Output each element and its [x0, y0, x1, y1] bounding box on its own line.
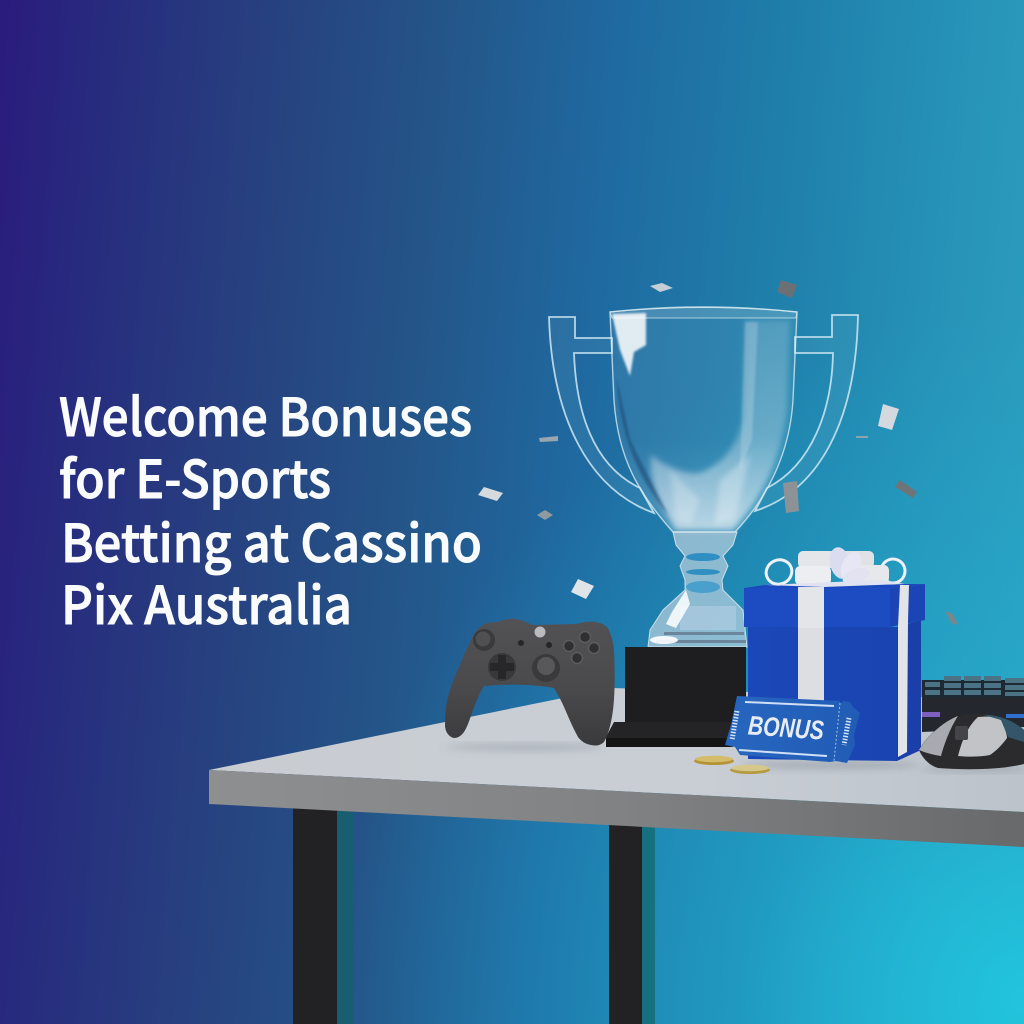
- lid top sliver: [744, 584, 925, 588]
- trophy base: [606, 647, 746, 747]
- mouse: [919, 714, 1024, 769]
- trophy left handle: [549, 317, 654, 513]
- keyboard: [922, 676, 1024, 732]
- face buttons: [564, 632, 600, 664]
- ribbon front: [798, 628, 824, 703]
- left thumbstick: [473, 629, 495, 651]
- confetti: [478, 280, 958, 625]
- title: Betting at Cassino: [61, 502, 482, 577]
- box lid side: [890, 584, 925, 627]
- title: [59, 376, 482, 639]
- small buttons: [518, 640, 552, 648]
- ticket barcode: left: [732, 711, 737, 740]
- d-pad: [488, 653, 516, 681]
- bowl rim: [610, 308, 797, 318]
- scroll wheel: [955, 726, 968, 740]
- ticket label: BONUS: [747, 710, 825, 746]
- object shadows: [445, 744, 1024, 772]
- stem reflections: [650, 553, 746, 644]
- right thumbstick: [532, 654, 560, 682]
- trophy: [549, 307, 858, 747]
- mouse right panel: [958, 717, 1007, 757]
- table leg: left: [293, 805, 354, 1024]
- gift box: [744, 545, 925, 761]
- table front edge: [209, 770, 1024, 847]
- box body side: [897, 620, 921, 761]
- table leg: right: [609, 822, 655, 1024]
- bow: [762, 545, 909, 588]
- ribbon vertical: [798, 587, 824, 628]
- coin: right: [730, 765, 770, 774]
- box lid front: [744, 588, 890, 627]
- bonus ticket: [725, 696, 860, 763]
- trophy stem: [648, 532, 747, 647]
- ticket barcode: right: [844, 718, 849, 745]
- game controller: [445, 619, 615, 746]
- coin: left: [694, 756, 734, 765]
- home button: [534, 626, 546, 638]
- ribbon side: [898, 585, 909, 757]
- box body front: [748, 627, 897, 761]
- trophy right handle: [755, 315, 858, 511]
- table: [209, 688, 1024, 1024]
- bowl highlights: [612, 313, 790, 530]
- mouse right shell: [984, 715, 1024, 742]
- title: Pix Australia: [61, 564, 352, 639]
- mouse left panel: [919, 716, 958, 756]
- title: Welcome Bonuses: [59, 376, 472, 451]
- table top surface: [209, 688, 1024, 812]
- trophy bowl: [610, 307, 797, 532]
- title: for E-Sports: [59, 438, 331, 513]
